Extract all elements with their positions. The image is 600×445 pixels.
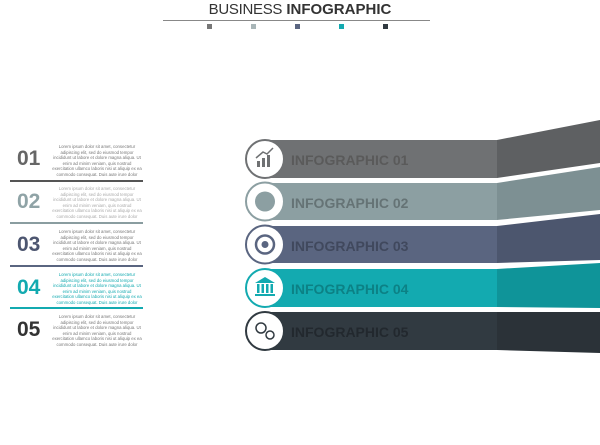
title: BUSINESS INFOGRAPHIC — [209, 1, 391, 18]
left list: Lorem ipsum dolor sit amet, consectetur adipiscing elit, sed do eiusmod tempor incididunt ut labore et dolore magna aliqua. Ut enim ad minim veniam, quis nostrud exercitation ullamco laboris nisi ut aliquip ex ea commodo consequat. Duis aute irure dolor — [52, 186, 142, 219]
left list: Lorem ipsum dolor sit amet, consectetur adipiscing elit, sed do eiusmod tempor incididunt ut labore et dolore magna aliqua. Ut enim ad minim veniam, quis nostrud exercitation ullamco laboris nisi ut aliquip ex ea commodo consequat. Duis aute irure dolor — [52, 314, 142, 347]
bar 1: INFOGRAPHIC 01 — [291, 152, 409, 168]
bar 5: INFOGRAPHIC 05 — [291, 324, 409, 340]
bar 2 — [246, 167, 600, 220]
left list: Lorem ipsum dolor sit amet, consectetur adipiscing elit, sed do eiusmod tempor incididunt ut labore et dolore magna aliqua. Ut enim ad minim veniam, quis nostrud exercitation ullamco laboris nisi ut aliquip ex ea commodo consequat. Duis aute irure dolor — [52, 144, 142, 177]
item 03: 03 — [17, 233, 40, 256]
left list: Lorem ipsum dolor sit amet, consectetur adipiscing elit, sed do eiusmod tempor incididunt ut labore et dolore magna aliqua. Ut enim ad minim veniam, quis nostrud exercitation ullamco laboris nisi ut aliquip ex ea commodo consequat. Duis aute irure dolor — [52, 229, 142, 262]
item 02: 02 — [17, 190, 40, 213]
bar 4: INFOGRAPHIC 04 — [291, 281, 409, 297]
bar 3 — [246, 214, 600, 264]
item 04: 04 — [17, 276, 40, 299]
bar 5 — [246, 312, 600, 353]
item 01: 01 — [17, 147, 40, 170]
bar 1 — [246, 120, 600, 178]
item 05: 05 — [17, 318, 40, 341]
bar 3: INFOGRAPHIC 03 — [291, 238, 409, 254]
bar 4 — [246, 263, 600, 308]
left list — [10, 144, 143, 347]
left list: Lorem ipsum dolor sit amet, consectetur adipiscing elit, sed do eiusmod tempor incididunt ut labore et dolore magna aliqua. Ut enim ad minim veniam, quis nostrud exercitation ullamco laboris nisi ut aliquip ex ea commodo consequat. Duis aute irure dolor — [52, 272, 142, 305]
color key squares — [207, 24, 388, 29]
bar 2: INFOGRAPHIC 02 — [291, 195, 409, 211]
